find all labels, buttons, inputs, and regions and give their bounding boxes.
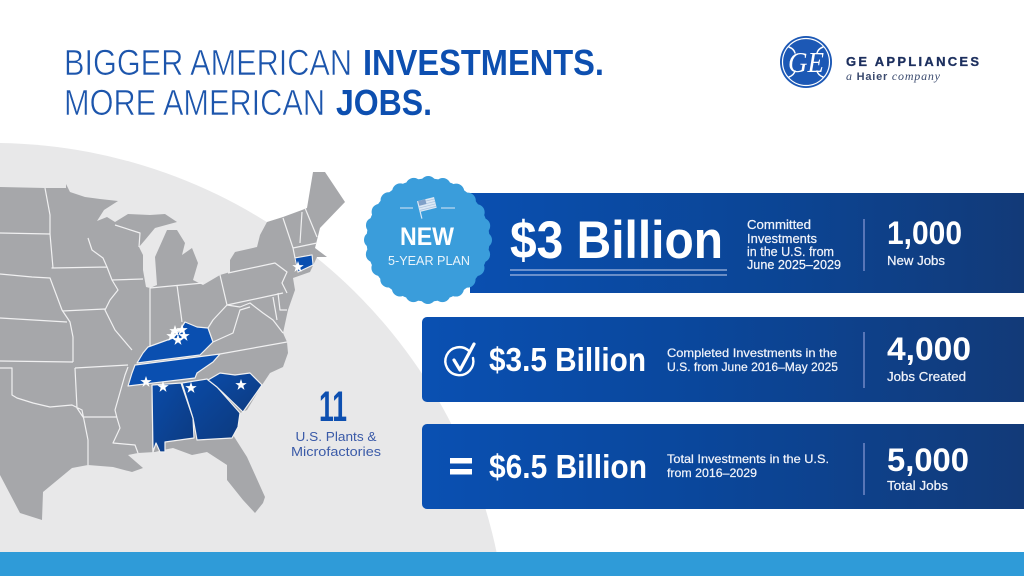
title: BIGGER AMERICAN <box>64 42 352 83</box>
icon: equals sign <box>450 458 472 474</box>
jobs stat: Total Jobs <box>887 478 949 493</box>
description: Investments <box>747 232 817 246</box>
logo wordmark: GE APPLIANCES <box>846 54 979 69</box>
plant location stars <box>140 261 304 393</box>
map of eastern United States <box>0 172 345 520</box>
description <box>667 346 838 374</box>
panel: $3.5 billion completed: $3.5 Billion <box>489 341 646 378</box>
title <box>64 42 604 123</box>
state: Connecticut <box>295 255 313 272</box>
badge: new 5-year plan: NEW <box>400 223 454 251</box>
badge: new 5-year plan <box>366 178 490 302</box>
jobs stat <box>887 331 971 384</box>
logo: GE Appliances <box>780 36 979 88</box>
description <box>747 218 841 272</box>
panel: $3.5 billion completed <box>422 317 1024 402</box>
description: in the U.S. from <box>747 245 834 259</box>
icon: GE monogram: GE <box>788 47 824 79</box>
states: Kentucky and Tennessee <box>128 322 220 386</box>
jobs stat: Jobs Created <box>887 369 966 384</box>
states: Alabama, Georgia, South Carolina <box>152 373 262 452</box>
logo tagline: a Haier company <box>846 69 941 83</box>
plants callout: Microfactories <box>291 444 382 459</box>
title: JOBS. <box>336 82 432 123</box>
jobs stat: New Jobs <box>887 253 946 268</box>
jobs stat <box>887 442 969 493</box>
title: MORE AMERICAN <box>64 82 325 123</box>
panel: $6.5 billion total <box>422 424 1024 509</box>
double underline <box>510 270 727 275</box>
description: Committed <box>747 218 811 232</box>
panel: new $3 billion plan <box>470 193 1024 293</box>
land mass <box>0 172 345 520</box>
badge: new 5-year plan: 5-YEAR PLAN <box>388 254 470 268</box>
amount: $3 Billion <box>510 211 723 270</box>
background circle <box>0 143 501 576</box>
description: Completed Investments in the <box>667 346 837 360</box>
jobs stat: 4,000 <box>887 331 971 367</box>
description <box>667 452 829 480</box>
plants callout <box>291 383 382 459</box>
description: June 2025–2029 <box>747 258 841 272</box>
state borders <box>0 188 317 465</box>
icon: flag <box>418 197 438 219</box>
bottom bar <box>0 552 1024 576</box>
icon: check in circle <box>445 344 474 375</box>
jobs stat <box>887 215 962 268</box>
description: U.S. from June 2016–May 2025 <box>667 360 838 374</box>
panel: $6.5 billion total: $6.5 Billion <box>489 448 647 485</box>
title: INVESTMENTS. <box>363 42 604 83</box>
plants callout: U.S. Plants & <box>296 429 377 444</box>
description: from 2016–2029 <box>667 466 757 480</box>
jobs stat: 1,000 <box>887 215 962 251</box>
plants callout: 11 <box>319 383 347 431</box>
icon: GE monogram <box>780 36 832 88</box>
jobs stat: 5,000 <box>887 442 969 478</box>
description: Total Investments in the U.S. <box>667 452 829 466</box>
